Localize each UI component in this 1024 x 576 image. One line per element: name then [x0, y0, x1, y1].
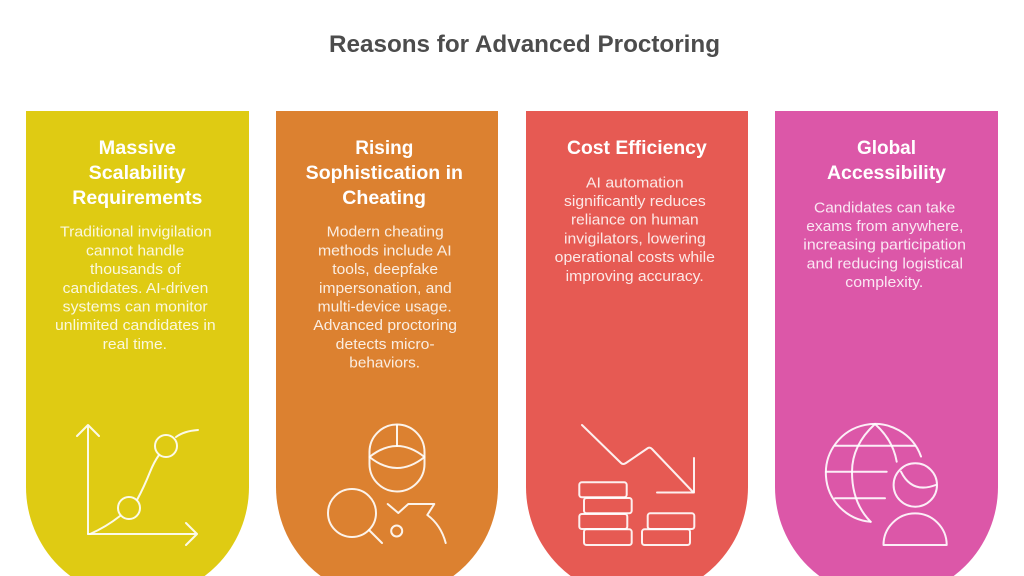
- icon: person with magnifying glass: [328, 424, 446, 543]
- text block: cost description: operational costs while: [555, 250, 715, 266]
- text block: scalability description: systems can monitor: [63, 300, 208, 316]
- heading: global accessibility: [827, 138, 946, 184]
- text block: cost description: reliance on human: [571, 213, 699, 229]
- heading: massive scalability requirements: Scalability: [89, 163, 186, 184]
- text block: accessibility description: increasing participation: [803, 238, 966, 254]
- text block: cost description: significantly reduces: [564, 194, 706, 210]
- text block: cost description: improving accuracy.: [566, 269, 704, 285]
- heading: massive scalability requirements: [72, 138, 202, 209]
- text block: cheating description: detects micro-: [336, 337, 435, 353]
- text block: cheating description: tools, deepfake: [332, 262, 438, 278]
- heading: rising sophistication in cheating: Rising: [355, 138, 413, 159]
- icon: growth chart: [77, 425, 198, 545]
- text block: accessibility description: and reducing logistical: [807, 256, 963, 272]
- text block: cost description: AI automation: [586, 175, 684, 191]
- text block: cheating description: [313, 225, 457, 372]
- text block: accessibility description: complexity.: [845, 275, 923, 291]
- heading: rising sophistication in cheating: [306, 138, 463, 209]
- panel: rising sophistication in cheating: [276, 111, 498, 576]
- heading: massive scalability requirements: Requirements: [72, 188, 202, 209]
- text block: scalability description: Traditional invigilation: [60, 225, 212, 241]
- text block: cheating description: impersonation, and: [319, 281, 452, 297]
- text block: accessibility description: exams from anywhere,: [806, 219, 963, 235]
- text block: accessibility description: Candidates can take: [814, 200, 955, 216]
- heading: global accessibility: Accessibility: [827, 163, 946, 184]
- icon: globe and user: [826, 424, 947, 545]
- heading: rising sophistication in cheating: Sophistication in: [306, 163, 463, 184]
- text block: scalability description: cannot handle: [86, 243, 184, 259]
- title: Reasons for Advanced Proctoring: [329, 31, 720, 58]
- text block: cheating description: Advanced proctoring: [313, 318, 457, 334]
- text block: scalability description: unlimited candidates in: [55, 318, 216, 334]
- text block: cheating description: methods include AI: [318, 243, 452, 259]
- panel: cost efficiency: [526, 111, 748, 576]
- text block: scalability description: real time.: [103, 337, 167, 353]
- text block: cheating description: Modern cheating: [327, 225, 444, 241]
- text block: cheating description: behaviors.: [349, 356, 420, 372]
- heading: rising sophistication in cheating: Cheating: [342, 188, 426, 209]
- heading: cost efficiency: Cost Efficiency: [567, 138, 707, 159]
- text block: scalability description: [55, 225, 216, 353]
- icon: falling costs and coins: [579, 425, 694, 545]
- panel: massive scalability requirements: [26, 111, 249, 576]
- text block: cheating description: multi-device usage.: [318, 300, 452, 316]
- text block: scalability description: candidates. AI-driven: [63, 281, 208, 297]
- text block: accessibility description: [803, 200, 966, 291]
- text block: cost description: invigilators, lowering: [564, 231, 706, 247]
- heading: massive scalability requirements: Massive: [99, 138, 176, 159]
- heading: global accessibility: Global: [857, 138, 916, 159]
- text block: scalability description: thousands of: [90, 262, 182, 278]
- panel: global accessibility: [775, 111, 998, 576]
- text block: cost description: [555, 175, 715, 285]
